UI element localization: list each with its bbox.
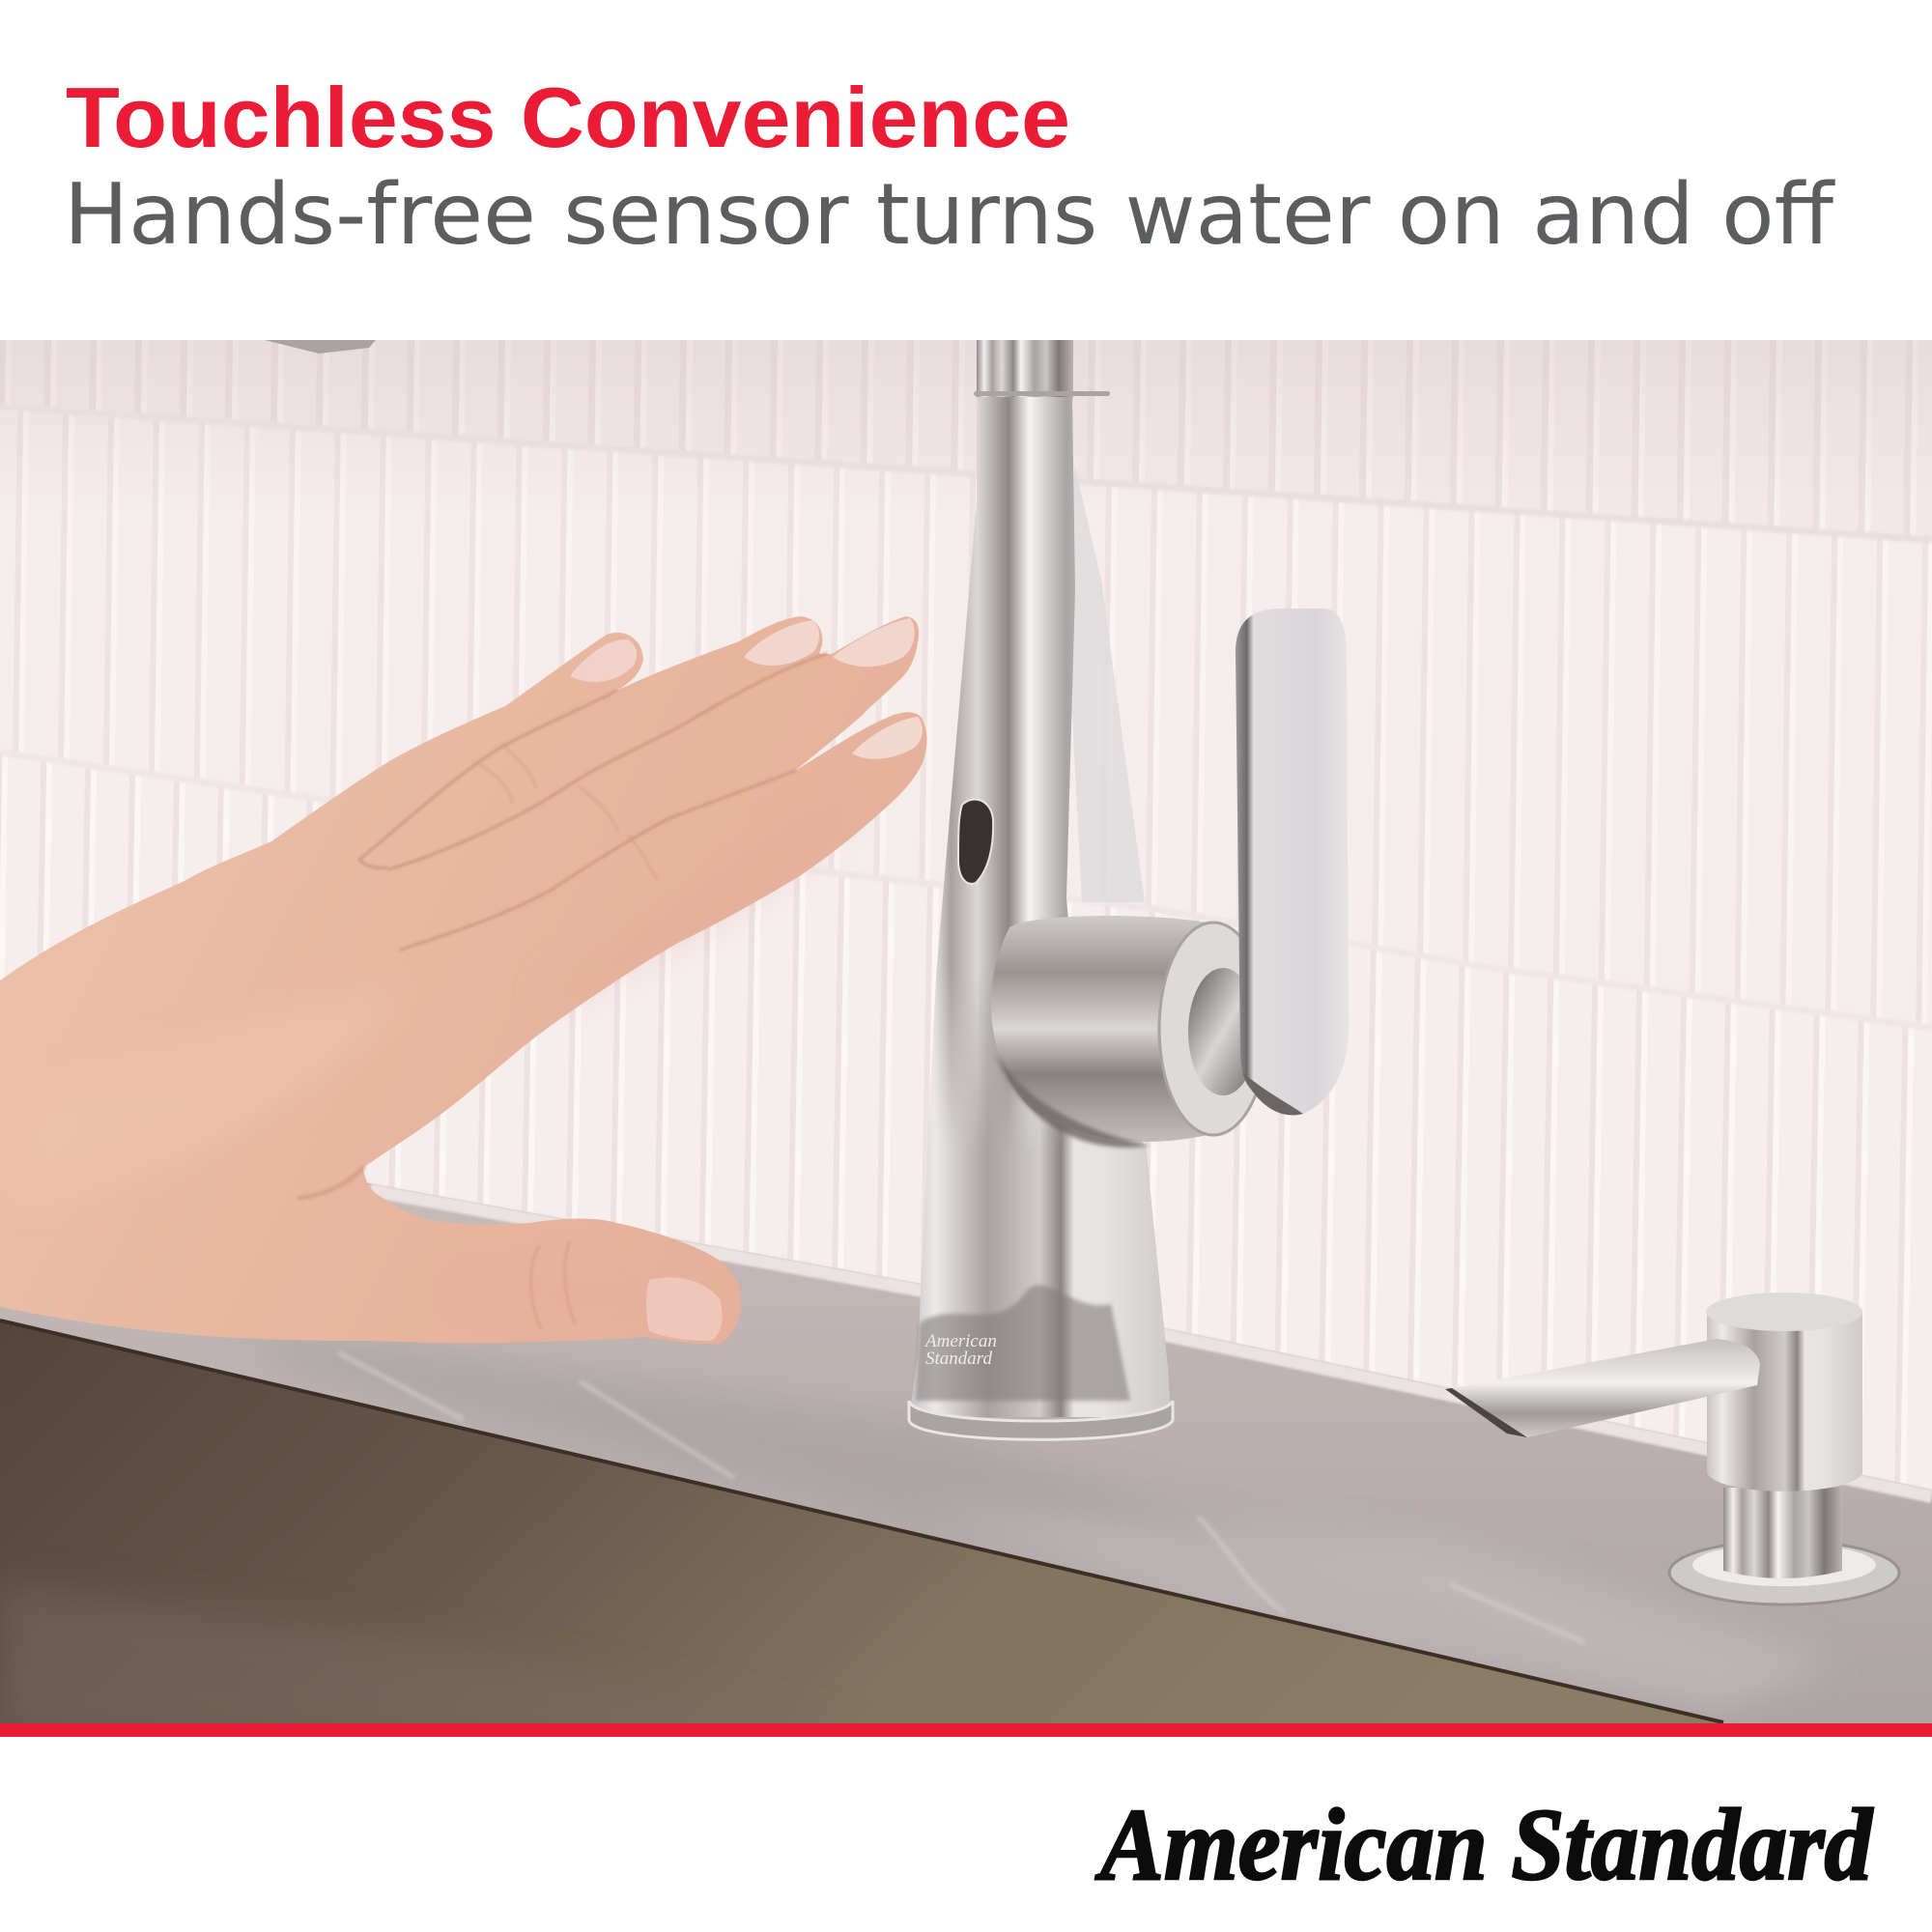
- tiled backsplash: [0, 340, 1932, 1507]
- dispenser base disc: [1669, 1541, 1899, 1605]
- cylinder center hub: [1188, 968, 1245, 1095]
- engraved brand second line: Standard: [925, 1349, 992, 1369]
- photo: hand near touchless faucet: [0, 340, 1932, 1739]
- faucet reflection on wall: [1070, 464, 1145, 902]
- dispenser stem: [1723, 1488, 1842, 1578]
- faucet neck: [977, 340, 1073, 398]
- hand silhouette: [0, 616, 927, 1344]
- logo: American Standard: American Standard: [1094, 1788, 1874, 1901]
- sensor window: [958, 800, 993, 884]
- base ring: [909, 1401, 1173, 1439]
- hand: [0, 616, 927, 1344]
- cylinder under shadow: [995, 1053, 1150, 1148]
- soap dispenser: [1445, 1293, 1899, 1605]
- red divider bar: [0, 1723, 1932, 1737]
- handle highlight: [1242, 1072, 1303, 1115]
- sink basin: [0, 1321, 1723, 1739]
- dispenser head: [1707, 1312, 1862, 1492]
- handle cylinder: [991, 916, 1208, 1142]
- countertop: [0, 1182, 1932, 1723]
- faucet body: [932, 397, 1165, 1342]
- base reflection: [916, 1285, 1130, 1401]
- engraved brand on faucet: American: [923, 1331, 997, 1351]
- faucet: [909, 340, 1349, 1439]
- dispenser pump top: [1706, 1293, 1862, 1331]
- hand shading: [19, 985, 406, 1198]
- finger separation lines: [299, 654, 826, 1328]
- collar ring: [974, 391, 1110, 396]
- lower body: [909, 966, 1171, 1417]
- dispenser spout: [1452, 1339, 1760, 1437]
- lever handle: [1236, 609, 1349, 1114]
- heading: Touchless Convenience: Touchless Convenience: [66, 70, 1070, 165]
- cylinder end ring: [1159, 923, 1267, 1135]
- subheading: Hands-free sensor: Hands-free sensor turns water on and off: [64, 165, 1835, 264]
- fingernails: [570, 618, 923, 1341]
